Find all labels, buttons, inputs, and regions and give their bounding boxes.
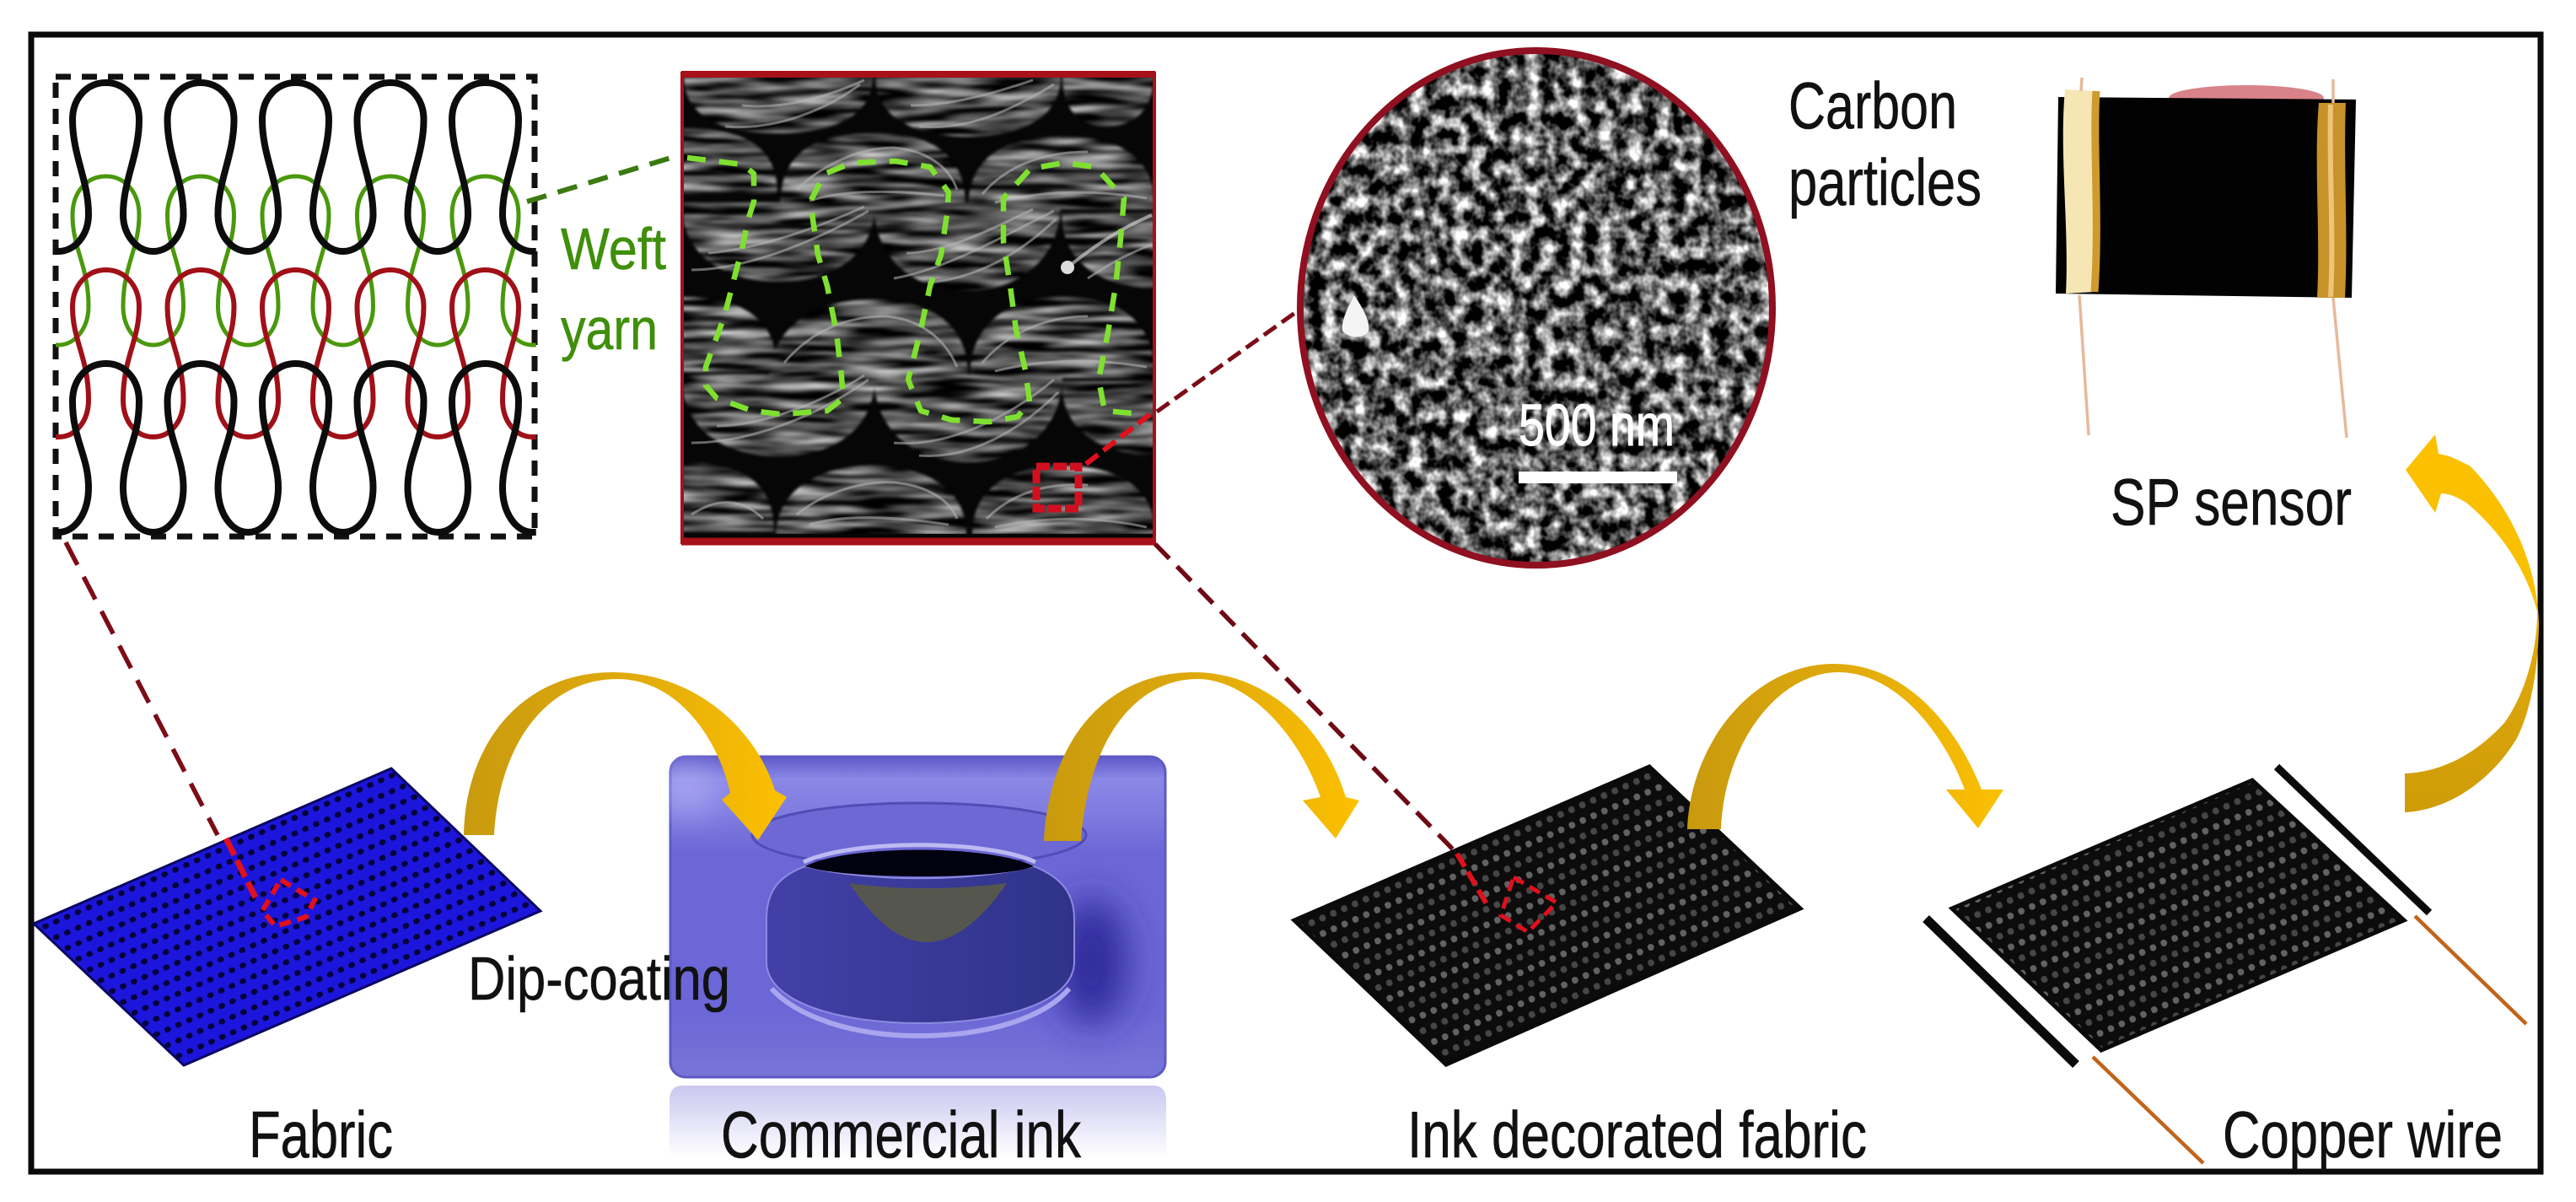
panel: knit structure schematic [56,77,536,536]
yarn bundles [681,77,1155,534]
label: Fabric: Fabric [249,1097,393,1172]
upper black yarn [56,83,536,251]
left electrode [2063,89,2096,294]
side edges [682,73,1154,542]
red marker square [1036,466,1078,509]
SEM panel border [681,73,1155,542]
red zoom marker [1457,854,1488,907]
dashed outline [56,77,535,536]
opening highlight [804,845,1035,862]
label: Weft yarn [561,216,666,362]
label: Weft yarn: Weft [561,216,666,282]
bright particle [1342,295,1369,337]
left electrode gold edge [2095,91,2096,292]
wires [2079,78,2347,438]
panel: fabric with copper electrodes [1926,767,2526,1163]
right copper wire [2415,916,2526,1024]
scale bar [1519,472,1677,483]
red dashed box [262,880,315,926]
arrow: decorated fabric to copper wire [1687,664,2003,829]
connector: SEM to carbon particle circle [1157,312,1296,412]
left highlight and shadow [658,770,1127,1025]
well rim [752,803,1086,867]
panel: carbon particle SEM circle [1300,51,1772,565]
label: Commercial ink: Commercial ink [721,1097,1082,1172]
label: SP sensor: SP sensor [2111,465,2352,539]
label: Weft yarn: yarn [561,296,658,362]
callout: weft yarn connector [527,157,674,202]
weft yarn: upper green [56,176,536,345]
bottom edge [681,538,1155,545]
label: Carbon particles: particles [1788,145,1982,219]
label: Carbon particles [1788,68,1982,219]
connector: SEM to ink decorated fabric [1155,544,1457,854]
dark opening [805,850,1034,876]
left copper wire [2093,1057,2203,1163]
ink spot [849,883,1007,942]
red yarn [56,270,536,437]
fibre highlights [691,80,1152,527]
red marker line [1086,412,1154,464]
arrow: copper wire to SP sensor [2405,434,2539,812]
panel: commercial ink container [658,757,1166,1157]
cast shadow [1057,898,1127,1025]
panel: SP sensor photo [2056,78,2356,438]
label: Ink decorated fabric: Ink decorated fabric [1407,1097,1867,1172]
well bottom highlight [772,989,1069,1036]
circle outline [1300,51,1772,565]
panel: blue fabric [34,768,540,1065]
right electrode bar [2277,767,2429,913]
lower black yarn [56,364,536,532]
label: Carbon particles: Carbon [1788,68,1957,143]
bright fibre end [1061,261,1074,274]
well body [766,866,1074,1023]
pink fabric edge [2169,85,2324,110]
scale label: 500 nm [1519,392,1675,458]
label: Dip-coating: Dip-coating [468,946,730,1013]
sensor body [2056,97,2356,298]
arrow: ink to decorated fabric [1044,672,1359,841]
red zoom marker [226,838,255,897]
fabric sheet [34,768,540,1065]
container base [670,757,1165,1077]
left electrode bar [1926,919,2076,1065]
panel: SEM image of fabric [681,72,1155,544]
fabric sheet [1952,780,2404,1050]
bright corner [658,770,717,807]
panel: ink decorated fabric [1294,767,1800,1065]
reflection [670,1086,1166,1157]
top edge [681,71,1155,78]
connector: knit schematic to fabric [66,542,218,835]
green dashed yarn path [687,158,1143,422]
red dashed box [1501,877,1557,932]
right electrode [2317,103,2346,298]
fabric sheet [1294,767,1800,1065]
grain texture [1300,51,1772,565]
label: Copper wire: Copper wire [2223,1097,2503,1172]
arrow: fabric to ink [464,672,787,840]
